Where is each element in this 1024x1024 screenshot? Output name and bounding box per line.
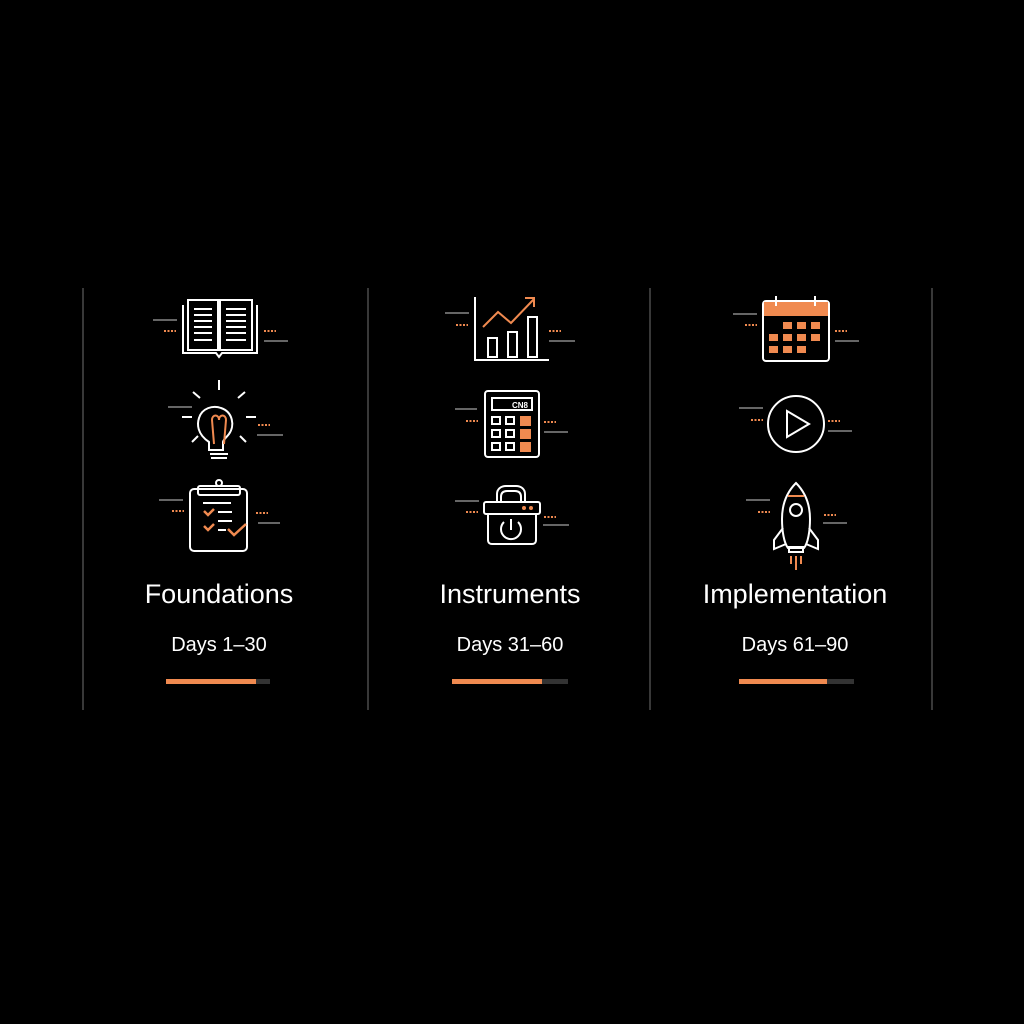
icon: chart <box>445 297 575 360</box>
icon: calculator: CN8 <box>512 401 529 410</box>
icon: toolbox <box>455 486 569 544</box>
heading: Implementation <box>703 579 887 609</box>
icon: rocket <box>746 483 847 570</box>
heading: Instruments <box>439 579 581 609</box>
text: days: Days 31–60 <box>457 634 563 656</box>
panel: foundations <box>145 300 293 684</box>
text: days: Days 61–90 <box>742 634 848 656</box>
heading: Foundations <box>145 579 293 609</box>
progress bar <box>166 679 270 684</box>
progress bar <box>739 679 854 684</box>
panel: instruments <box>439 297 581 684</box>
text: days: Days 1–30 <box>171 634 267 656</box>
panel: implementation <box>703 296 887 684</box>
icon: calculator <box>455 391 568 457</box>
icon: calendar <box>733 296 859 361</box>
progress bar <box>452 679 568 684</box>
icon: book <box>153 300 288 357</box>
icon: play <box>739 396 852 452</box>
icon: lightbulb <box>168 380 283 458</box>
icon: clipboard <box>159 480 280 551</box>
